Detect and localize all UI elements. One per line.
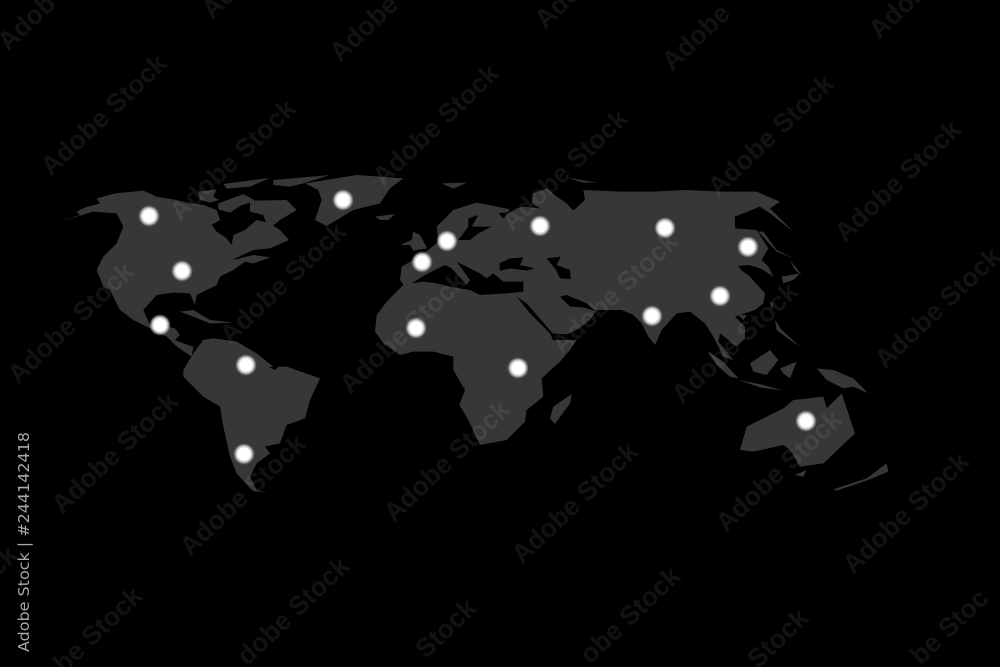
Banks and Victoria islands [198, 189, 219, 203]
Sulawesi [780, 362, 797, 378]
watermarks: Adobe Stock [665, 276, 804, 409]
watermarks: Adobe [655, 0, 736, 76]
watermarks: Adobe Stock [495, 103, 634, 236]
North America [60, 191, 289, 357]
watermarks: Adobe Stock [701, 68, 840, 201]
watermarks: obe Stock [574, 560, 686, 667]
land: Americas [60, 191, 320, 493]
Central Arctic islands [218, 194, 255, 213]
New Zealand [833, 463, 888, 491]
White Sea [498, 212, 510, 218]
New Guinea [817, 368, 868, 393]
watermarks: Adobe Stock [545, 226, 684, 359]
Australia [740, 393, 855, 467]
stock image credit: Adobe Stock | #244142418 [15, 432, 33, 652]
glowing location dots [138, 189, 817, 465]
Afro-Eurasia [375, 188, 793, 445]
Baffin island [250, 200, 297, 229]
watermarks: Adobe Stock [34, 48, 173, 181]
land: Eurasia, Africa and Oceania [375, 177, 888, 491]
Iceland [375, 214, 395, 220]
South America [183, 338, 320, 493]
Queen Elizabeth islands [223, 178, 270, 189]
watermarks: Adobe Stock [377, 394, 516, 527]
Britain and Ireland [400, 232, 427, 251]
Sakhalin [758, 232, 793, 258]
Svalbard [442, 183, 467, 189]
Baltic Sea [458, 215, 492, 240]
Sumatra [708, 352, 738, 378]
watermarks: Adobe Stock [505, 436, 644, 569]
Greenland [305, 175, 403, 226]
land: Arctic islands and Greenland [198, 175, 403, 263]
Japan [782, 273, 800, 283]
Taiwan and Hainan [770, 302, 773, 310]
Amazon mouth [269, 365, 280, 370]
Black Sea [499, 257, 535, 271]
watermarks: Adobe Stock [213, 216, 352, 349]
watermarks: Adobe Stock [828, 114, 967, 247]
watermarks: Adobe Stock [366, 58, 505, 191]
watermarks: Adobe Stock [45, 386, 184, 519]
Cuba and Caribbean [180, 310, 233, 323]
Caspian Sea [547, 257, 571, 279]
watermarks: Adobe Stock [709, 404, 848, 537]
watermarks: Adobe Stock [1, 256, 140, 389]
Philippines [775, 320, 800, 347]
Red Sea and Gulf of Aden [517, 297, 577, 341]
watermarks: Adobe Stock [836, 446, 975, 579]
Java and Lesser Sunda [738, 380, 783, 391]
Ellesmere island [273, 175, 330, 187]
watermarks: Stock [409, 592, 482, 664]
Persian Gulf [560, 295, 597, 312]
watermarks: Adobe Stock [163, 93, 302, 226]
Tasmania [795, 470, 807, 477]
watermarks: Adobe Stock [333, 266, 472, 399]
Novaya Zemlya [567, 177, 597, 183]
watermarks: Adobe Stock [173, 428, 312, 561]
Borneo [750, 350, 778, 375]
Mediterranean Sea [412, 262, 523, 295]
Madagascar [550, 394, 572, 424]
Newfoundland [233, 255, 271, 263]
